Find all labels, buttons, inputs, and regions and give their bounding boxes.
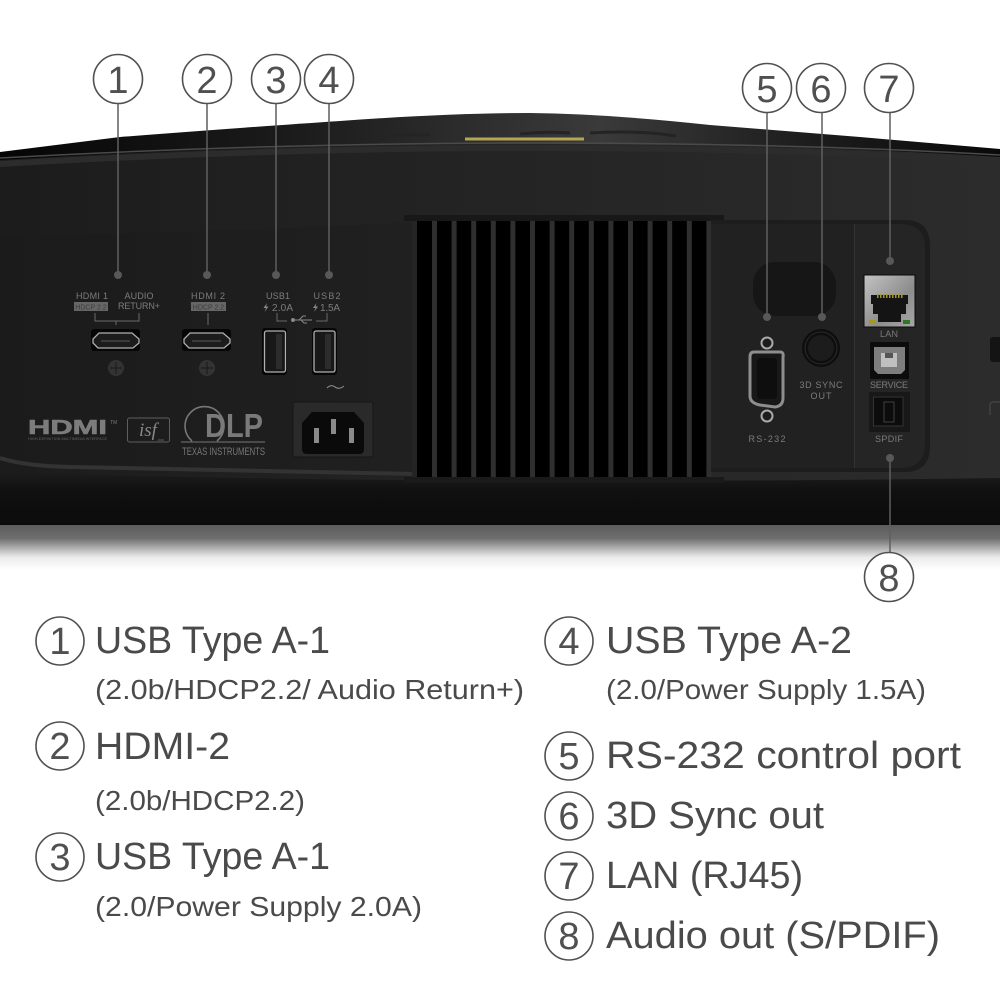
USB trident symbol (291, 316, 312, 323)
top cover (0, 113, 1000, 170)
legend item 2: (2.0b/HDCP2.2) (95, 785, 305, 816)
label: audio return: AUDIO (124, 291, 154, 301)
legend item 2: HDMI-2 (95, 726, 230, 768)
label: USB2: USB2 (314, 291, 340, 301)
logo: DLP Texas Instruments: DLP (205, 407, 263, 444)
SPDIF port (869, 392, 910, 444)
floor shadow (0, 525, 1000, 570)
legend item 2: 2 (49, 726, 71, 768)
port group: HDMI 2 (182, 291, 231, 376)
logo: HDMI: TM (110, 420, 117, 426)
legend item 1 (36, 617, 524, 705)
legend item 4: USB Type A-2 (606, 620, 852, 662)
logo: HDMI: HIGH-DEFINITION MULTIMEDIA INTERFACE (28, 437, 108, 441)
callout 4 (304, 54, 354, 279)
power inlet (293, 402, 373, 457)
legend item 3: 3 (49, 837, 71, 879)
legend item 1: (2.0b/HDCP2.2/ Audio Return+) (95, 674, 524, 705)
3D sync port: 3D SYNC (800, 380, 843, 390)
callout 5: 5 (756, 69, 778, 111)
legend item 8: 8 (558, 916, 580, 958)
AC symbol (327, 386, 344, 388)
USB 1 socket (262, 328, 287, 375)
logo: isf (128, 418, 170, 442)
label: return plus: RETURN+ (118, 301, 160, 311)
callout 7: 7 (878, 69, 900, 111)
LAN port (864, 275, 915, 339)
legend item 4 (545, 617, 926, 705)
port group: HDMI 1 (74, 291, 160, 376)
gold indicator bar (465, 138, 584, 140)
legend item 3: USB Type A-1 (95, 836, 330, 878)
RS-232 port (748, 338, 786, 444)
callout 2 (182, 54, 232, 279)
projector body (0, 113, 1000, 525)
callout 7 (864, 64, 914, 265)
screw (199, 360, 215, 376)
RS-232 port: RS-232 (748, 434, 786, 444)
legend item 1: USB Type A-1 (95, 620, 330, 662)
callout 1: 1 (107, 60, 129, 102)
legend item 3: (2.0/Power Supply 2.0A) (95, 891, 422, 922)
callout 4: 4 (318, 60, 340, 102)
callout 6 (796, 64, 846, 321)
side outline mark (990, 402, 1000, 415)
logo: DLP Texas Instruments: TEXAS INSTRUMENTS (182, 446, 265, 458)
legend item 2 (36, 722, 305, 816)
badge: HDCP 2.2: HDCP 2.2 (193, 304, 224, 312)
callout 2: 2 (196, 60, 218, 102)
legend item 6: 3D Sync out (606, 795, 824, 837)
callout 8: 8 (878, 558, 900, 600)
logo: HDMI: HDMI (28, 417, 107, 439)
logo: isf: .ccc (157, 437, 164, 442)
HDMI 1 socket (91, 329, 140, 351)
SPDIF port: SPDIF (875, 434, 904, 444)
legend item 6 (545, 792, 824, 840)
legend item 6: 6 (558, 796, 580, 838)
callout 3 (252, 54, 300, 279)
label: HDMI 1: HDMI 1 (76, 291, 108, 301)
logo: DLP Texas Instruments (181, 407, 265, 458)
legend item 5: RS-232 control port (606, 735, 961, 777)
logo: isf: isf (139, 420, 160, 441)
legend item 5: 5 (558, 736, 580, 778)
legend item 7: LAN (RJ45) (606, 855, 803, 897)
service USB-B port (870, 342, 909, 390)
service USB-B port: SERVICE (870, 380, 908, 390)
legend item 1: 1 (49, 621, 71, 663)
legend item 7 (545, 852, 803, 900)
legend item 3 (36, 833, 422, 922)
badge: HDCP 2.2: HDCP 2.2 (75, 304, 107, 312)
vent grille (404, 215, 724, 483)
label: USB1 current: 2.0A (272, 303, 293, 314)
rubber plug (753, 262, 836, 316)
callout 8 (864, 454, 914, 602)
HDMI 2 socket (182, 329, 231, 351)
3D sync port: OUT (810, 391, 832, 401)
legend item 8: Audio out (S/PDIF) (606, 915, 940, 957)
icon: USB2 bolt (313, 303, 318, 312)
LAN port: LAN (880, 329, 898, 339)
callout 5 (742, 64, 792, 321)
label: HDMI 2: HDMI 2 (191, 291, 225, 301)
USB 2 socket (312, 328, 337, 375)
legend item 5 (545, 732, 961, 780)
screw (108, 360, 124, 376)
legend item 4: 4 (558, 621, 580, 663)
brand mark on top cover (386, 132, 676, 136)
left connector panel (0, 222, 415, 477)
callout 1 (94, 54, 142, 279)
right connector panel (711, 220, 930, 472)
callout 6: 6 (810, 69, 832, 111)
legend item 4: (2.0/Power Supply 1.5A) (606, 674, 926, 705)
3D sync port (800, 329, 843, 401)
label: USB2 current: 1.5A (320, 303, 340, 314)
logo: HDMI (28, 417, 117, 441)
lower base (0, 472, 1000, 525)
legend item 7: 7 (558, 856, 580, 898)
port group: USB 2 (312, 291, 340, 375)
callout 3: 3 (265, 60, 287, 102)
label: USB1: USB1 (266, 291, 290, 301)
port group: USB 1 (262, 291, 293, 375)
front face (0, 144, 1000, 525)
side button (990, 337, 1000, 362)
icon: USB1 bolt (264, 303, 268, 312)
